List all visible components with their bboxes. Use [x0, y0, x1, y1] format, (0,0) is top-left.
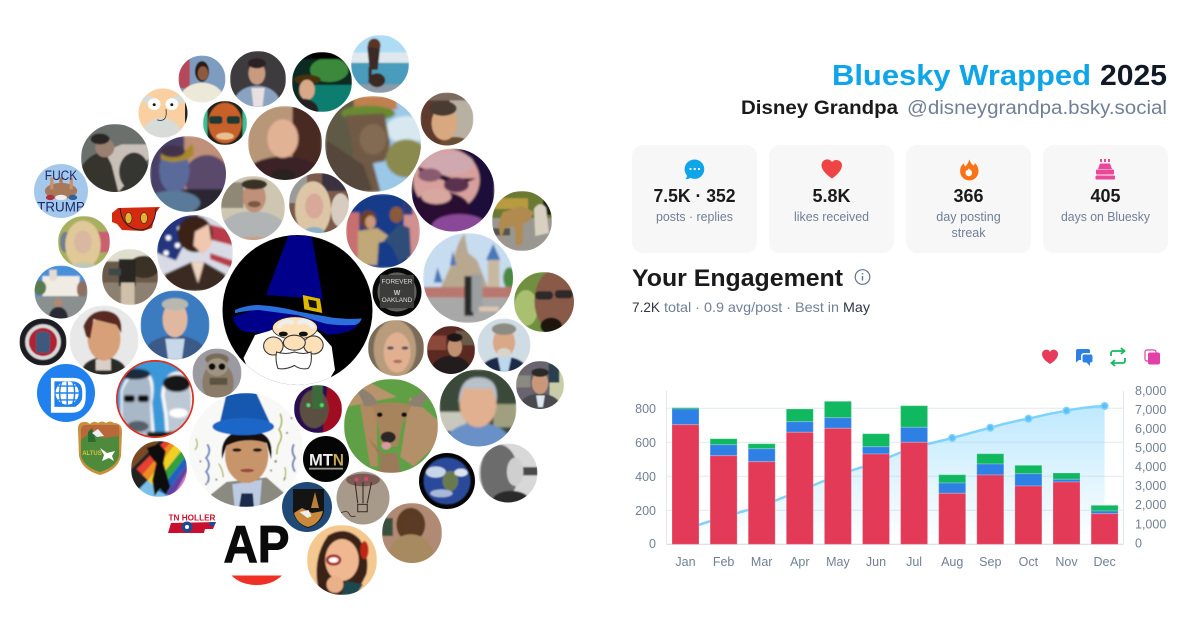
- avatar: two people with flags: [346, 194, 420, 268]
- right axis labels: 7,000: [1135, 403, 1166, 417]
- avatar: man in office: [516, 361, 564, 409]
- month labels: Nov: [1055, 555, 1078, 569]
- avatar: wizard main profile: [222, 235, 372, 385]
- stat label: day posting: [936, 210, 1001, 224]
- panel: posts stat: [632, 145, 757, 253]
- avatar: mission building with rider: [34, 266, 88, 318]
- avatar: rainbow silhouette: [131, 441, 187, 497]
- avatar: man on street: [102, 249, 158, 305]
- icon: heart: [822, 159, 842, 178]
- icon: info: [855, 270, 870, 284]
- avatar: man in New Year hat: [190, 393, 302, 507]
- left axis labels: 0: [649, 537, 656, 551]
- left axis labels: 400: [635, 470, 656, 484]
- avatar: Forever Oakland badge: [372, 268, 422, 316]
- avatar: woman in black and white: [478, 444, 538, 502]
- month labels: Mar: [751, 555, 772, 569]
- stat label: likes received: [794, 210, 869, 224]
- left axis labels: 600: [635, 436, 656, 450]
- stat value: 5.8K: [812, 186, 850, 206]
- avatar: purple mask art: [294, 385, 342, 433]
- user name and handle: Disney Grandpa: [741, 98, 898, 119]
- right axis labels: 6,000: [1135, 422, 1166, 436]
- icon: flame: [960, 160, 978, 180]
- avatar: TN Holler logo: TN HOLLER: [168, 512, 216, 522]
- chart: monthly engagement: [635, 384, 1166, 569]
- engagement summary: May: [843, 299, 870, 315]
- avatar: MTN logo: [303, 436, 349, 482]
- avatar: Fuck Trump badge: [34, 164, 88, 218]
- month labels: [675, 555, 1116, 569]
- chart legend: [1042, 348, 1160, 366]
- avatar: Altus shield: [78, 422, 122, 475]
- stat label: posts · replies: [656, 210, 733, 224]
- engagement summary: total · 0.9 avg/post · Best in: [664, 299, 839, 315]
- month labels: Feb: [713, 555, 734, 569]
- month labels: Dec: [1093, 555, 1116, 569]
- avatar: Ground News logo: [37, 364, 95, 422]
- panel: likes stat: [769, 145, 894, 253]
- user name and handle: @disneygrandpa.bsky.social: [907, 98, 1167, 119]
- grid lines: [666, 391, 1124, 544]
- avatar: blonde woman in crowd: [289, 173, 349, 233]
- month labels: Jun: [866, 555, 886, 569]
- avatar: woman with flag: [178, 56, 226, 102]
- avatar: mickey shorts logo: [112, 207, 160, 231]
- avatar: Fuck Trump badge: TRUMP: [37, 200, 85, 215]
- month labels: Jan: [675, 555, 696, 569]
- left axis labels: [635, 402, 656, 551]
- right axis labels: 8,000: [1135, 384, 1166, 398]
- stat label: streak: [952, 226, 986, 240]
- avatar: couple at castle: [423, 233, 513, 323]
- panel: days on Bluesky stat: [1043, 145, 1168, 253]
- avatar: bald cartoon man: [138, 88, 188, 138]
- stat value: 405: [1090, 186, 1120, 206]
- stat value: 366: [954, 186, 984, 206]
- icon: quotes: [1145, 350, 1160, 364]
- panel: streak stat: [906, 145, 1031, 253]
- avatar: smiling man: [420, 92, 474, 146]
- avatar: man in sunglasses with foliage: [514, 272, 574, 332]
- cumulative area: [686, 406, 1105, 544]
- avatar: man in suit: [230, 51, 286, 107]
- engagement summary: 7.2K: [632, 299, 661, 315]
- avatar: Fuck Trump badge: FUCK: [45, 168, 77, 183]
- month labels: Oct: [1019, 555, 1039, 569]
- icon: likes: [1042, 350, 1058, 364]
- icon: reposts: [1111, 348, 1125, 366]
- avatar: blonde woman closeup: [368, 320, 424, 376]
- avatar: groot statue: [325, 96, 421, 192]
- avatar cloud: [20, 35, 575, 595]
- avatar: blonde woman with glasses: [58, 216, 110, 268]
- right axis labels: 5,000: [1135, 441, 1166, 455]
- avatar: two men, red ring: [116, 360, 194, 438]
- icon: cake: [1096, 159, 1115, 180]
- avatar: two dogs: [492, 191, 552, 251]
- avatar: woman in fur coat: [382, 503, 442, 563]
- right axis labels: [1135, 384, 1166, 550]
- avatar: painted man with glasses: [203, 101, 247, 145]
- avatar: park service shield: [282, 482, 332, 532]
- avatar: man with books: [427, 326, 475, 374]
- avatar: older man with blue background: [140, 290, 210, 360]
- avatar: TN Holler logo: [168, 512, 216, 533]
- month labels: Jul: [906, 555, 922, 569]
- month labels: Apr: [790, 555, 810, 569]
- avatar: bald man on webcam: [248, 106, 322, 180]
- avatar: white-haired man in suit: [478, 318, 530, 372]
- avatar: deer: [344, 379, 438, 473]
- stat value: 7.5K · 352: [654, 186, 736, 206]
- title: 2025: [1100, 60, 1167, 92]
- title: Bluesky Wrapped: [832, 60, 1091, 92]
- left axis labels: 800: [635, 402, 656, 416]
- avatar: woman with hat in jungle: [292, 52, 352, 112]
- cumulative line: [686, 403, 1108, 529]
- avatar: Forever Oakland badge: OAKLAND: [382, 297, 413, 304]
- avatar: man reclining in dark jacket: [81, 124, 149, 192]
- icon: replies: [1076, 349, 1092, 366]
- avatar: MTN logo: N: [333, 450, 344, 469]
- right axis labels: 3,000: [1135, 479, 1166, 493]
- avatar: cat in bow tie: [192, 348, 242, 398]
- avatar: woman with american flag: [157, 215, 233, 291]
- left axis labels: 200: [635, 504, 656, 518]
- avatar: AP logo: AP: [224, 516, 290, 574]
- avatar: Forever Oakland badge: FOREVER: [382, 279, 413, 286]
- avatar: silhouette by water: [351, 35, 409, 93]
- avatar: Forever Oakland badge: W: [394, 290, 401, 297]
- user name and handle: [741, 98, 1167, 119]
- right axis labels: 0: [1135, 536, 1142, 550]
- right axis labels: 1,000: [1135, 518, 1166, 532]
- avatar: Resistance fist badge: [20, 318, 66, 366]
- avatar: MTN logo: MT: [309, 450, 333, 469]
- right axis labels: 2,000: [1135, 498, 1166, 512]
- avatar: Altus shield: ALTUS: [82, 451, 102, 457]
- icon: chat bubble: [685, 159, 704, 179]
- right axis labels: 4,000: [1135, 460, 1166, 474]
- avatar: man in gray hoodie: [221, 176, 285, 240]
- month labels: Aug: [941, 555, 963, 569]
- avatar: blue alien with gold horns: [150, 136, 226, 212]
- stat label: days on Bluesky: [1061, 210, 1151, 224]
- avatar: George Takei: [440, 370, 516, 446]
- avatar: laughing pin-up woman: [307, 525, 377, 595]
- avatar: balloons drawing: [336, 472, 390, 524]
- month labels: Sep: [979, 555, 1001, 569]
- avatar: cartoon boy: [70, 306, 138, 374]
- heading: Your Engagement: Your Engagement: [632, 265, 843, 292]
- stat label: [936, 210, 1001, 240]
- stacked bars: [672, 401, 1118, 544]
- avatar: man with glasses, purple tint: [412, 148, 494, 232]
- avatar: Earth: [419, 453, 475, 509]
- month labels: May: [826, 555, 850, 569]
